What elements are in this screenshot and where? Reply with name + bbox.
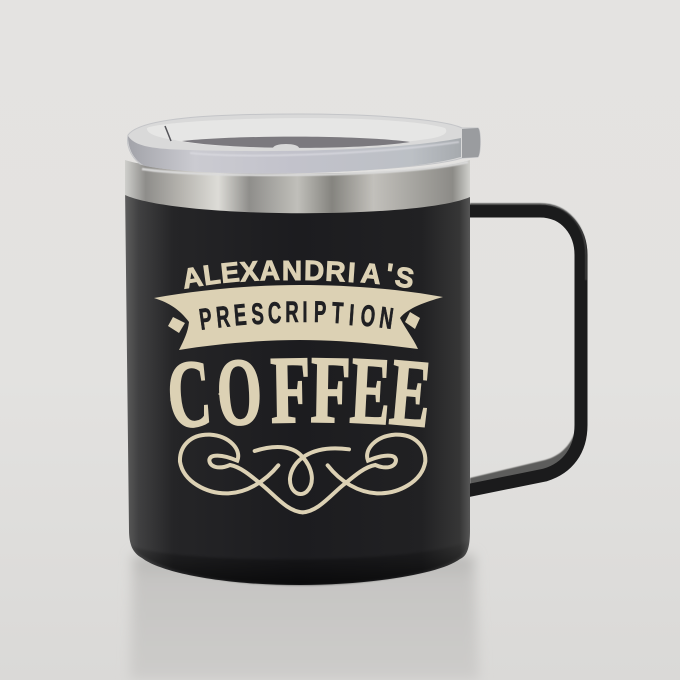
mug base shadow [130, 540, 469, 585]
handle [466, 204, 586, 491]
banner text: PRESCRIPTION: N [377, 301, 395, 336]
inner dark opening [182, 137, 410, 148]
word: COFFEE: E [386, 339, 435, 448]
banner text: PRESCRIPTION: I [348, 298, 355, 332]
word: COFFEE: F [310, 336, 351, 443]
clear lid [128, 114, 480, 175]
engraved logo [154, 255, 443, 512]
banner diamond right [405, 312, 420, 329]
word: COFFEE: C [163, 340, 215, 449]
banner text: PRESCRIPTION: E [233, 298, 248, 333]
lid top [128, 114, 480, 173]
name: ALEXANDRIA'S: S [393, 261, 417, 295]
name: ALEXANDRIA'S: R [325, 256, 346, 288]
sip hole [273, 144, 299, 152]
name: ALEXANDRIA'S: X [239, 255, 260, 288]
word: COFFEE: O [214, 338, 265, 447]
name: ALEXANDRIA'S: ' [384, 258, 395, 289]
lid opening [147, 118, 446, 148]
banner diamond left [168, 317, 185, 333]
banner text: PRESCRIPTION: T [331, 296, 344, 330]
mug body [125, 185, 470, 585]
banner text: PRESCRIPTION: O [359, 299, 377, 334]
banner text: PRESCRIPTION: S [250, 297, 265, 332]
word: COFFEE: F [270, 336, 311, 443]
name: ALEXANDRIA'S: A [180, 261, 205, 295]
name: ALEXANDRIA'S: A [259, 255, 280, 286]
banner text: PRESCRIPTION: C [267, 296, 282, 330]
banner [154, 285, 443, 350]
name: ALEXANDRIA'S: E [219, 256, 241, 289]
name: ALEXANDRIA'S [180, 255, 417, 295]
steel band [125, 160, 470, 213]
name: ALEXANDRIA'S: I [347, 257, 357, 288]
word: COFFEE [163, 336, 435, 449]
word: COFFEE: E [348, 338, 393, 446]
banner text: PRESCRIPTION: P [197, 302, 214, 337]
table reflection [130, 555, 479, 680]
letter spurs on C and O [170, 388, 226, 407]
banner text: PRESCRIPTION [197, 295, 395, 337]
lid front rim [128, 136, 461, 174]
name: ALEXANDRIA'S: L [201, 258, 222, 291]
banner text: PRESCRIPTION: I [302, 296, 308, 329]
banner text: PRESCRIPTION: R [215, 300, 231, 335]
name: ALEXANDRIA'S: D [304, 255, 325, 286]
flourish ornament [180, 435, 425, 512]
name: ALEXANDRIA'S: N [282, 255, 302, 286]
banner text: PRESCRIPTION: P [314, 295, 327, 329]
banner text: PRESCRIPTION: R [285, 296, 299, 329]
name: ALEXANDRIA'S: A [359, 257, 383, 290]
lid tab [462, 128, 480, 158]
